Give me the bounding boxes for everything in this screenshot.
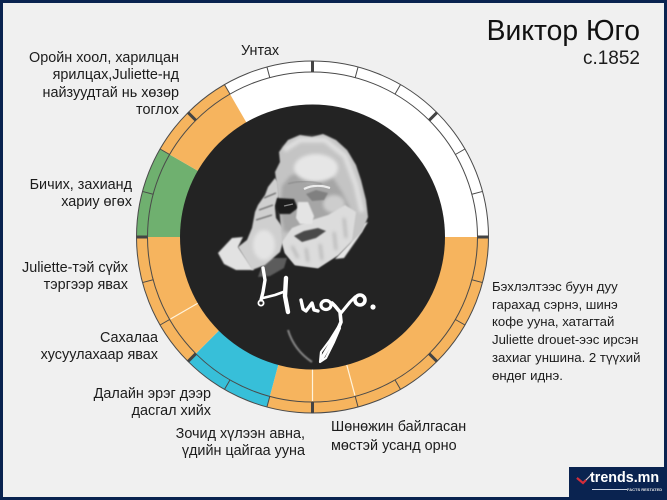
- label: dinner: Оройн хоол, харилцан: [29, 50, 179, 66]
- cuff: [218, 237, 254, 270]
- label: hotel: үдийн цайгаа уунa: [182, 443, 305, 459]
- logo wordmark: trends.mn: [590, 470, 659, 486]
- hair highlights: [284, 140, 362, 212]
- signature Hugo: [258, 268, 365, 362]
- ring base: sleep: [136, 61, 488, 413]
- label: beach exercise: [94, 386, 211, 419]
- left eye socket: [275, 198, 298, 214]
- right eye: [306, 190, 328, 201]
- beard: [282, 205, 356, 268]
- label: dinner: найзуудтай нь хөзөр: [43, 85, 179, 101]
- forehead highlight: [294, 154, 338, 182]
- coat fold highlight: [288, 330, 312, 362]
- label: morning: гарахад сэрнэ, шинэ: [492, 297, 618, 312]
- label: dinner: ярилцах,Juliette-нд: [53, 67, 179, 83]
- label: morning: [492, 279, 640, 383]
- major ticks: [136, 61, 488, 413]
- label: writing: хариу өгөх: [61, 194, 132, 210]
- cheek highlight: [323, 195, 345, 213]
- title: Виктор Юго: [487, 14, 640, 46]
- label: beach exercise: Далайн эрэг дээр: [94, 386, 211, 402]
- label: barber: хусуулахаар явах: [41, 347, 158, 363]
- forehead wrinkles: [288, 182, 322, 184]
- label: night: Шөнөжин байлгасан: [331, 419, 466, 435]
- mouth shade: [294, 228, 326, 242]
- label: hotel: [176, 426, 305, 459]
- hour ticks: [142, 67, 483, 407]
- label: sleep: Унтах: [241, 43, 279, 59]
- center dark disc: [180, 104, 445, 370]
- label: morning: Juliette drouet-ээс ирсэн: [492, 332, 638, 347]
- ring outlines: [136, 61, 488, 413]
- label: night: мөстэй усанд орно: [331, 438, 457, 454]
- segment: morning, 90 to 195 degrees: [273, 237, 466, 391]
- label: morning: захиаг уншина. 2 түүхий: [492, 350, 640, 365]
- logo: trends.mn: [569, 467, 667, 500]
- portrait of Victor Hugo: [218, 134, 368, 277]
- label: morning: Бэхлэлтээс буун дуу: [492, 279, 618, 294]
- segment: carriage rides: [158, 237, 204, 346]
- label: carriage ride: Juliette-тэй сүйх: [22, 260, 128, 276]
- segment: writing: [158, 160, 179, 237]
- label: night: [331, 419, 466, 454]
- label: writing: [30, 177, 132, 210]
- label: morning: өндөг иднэ.: [492, 368, 563, 383]
- finger shadows: [256, 193, 276, 220]
- left eye glint: [284, 204, 293, 206]
- label: barber: Сахалаа: [100, 330, 158, 346]
- logo rule: [592, 489, 627, 490]
- label: dinner: тоглох: [136, 102, 179, 118]
- label: barber: [40, 330, 158, 363]
- label: beach exercise: дасгал хийх: [132, 403, 211, 419]
- label: hotel: Зочид хүлээн авна,: [176, 426, 305, 442]
- collar: [335, 222, 368, 259]
- right brow: [304, 186, 330, 189]
- tie: [258, 258, 287, 277]
- nose: [296, 202, 314, 224]
- signature dot: [370, 304, 376, 310]
- head silhouette with hair: [275, 134, 368, 268]
- white dividers inside ring: [170, 303, 355, 401]
- ring segments: [158, 104, 466, 391]
- logo check mark: [576, 473, 594, 484]
- face shading: [280, 172, 350, 232]
- hand: [238, 178, 286, 270]
- label: writing: Бичих, захианд: [30, 177, 132, 193]
- subtitle: year: с.1852: [583, 48, 640, 69]
- hand highlight: [253, 230, 275, 260]
- label: dinner: [29, 50, 179, 118]
- segment: dinner: [179, 104, 236, 160]
- beard texture: [292, 218, 346, 262]
- label: morning: кофе ууна, хатагтай: [492, 314, 614, 329]
- logo tagline text: FACTS RESTATED: [627, 487, 662, 492]
- label: carriage ride: тэргээр явах: [44, 277, 128, 293]
- segment: beach exercise: [204, 346, 273, 386]
- label: carriage ride: [22, 260, 128, 293]
